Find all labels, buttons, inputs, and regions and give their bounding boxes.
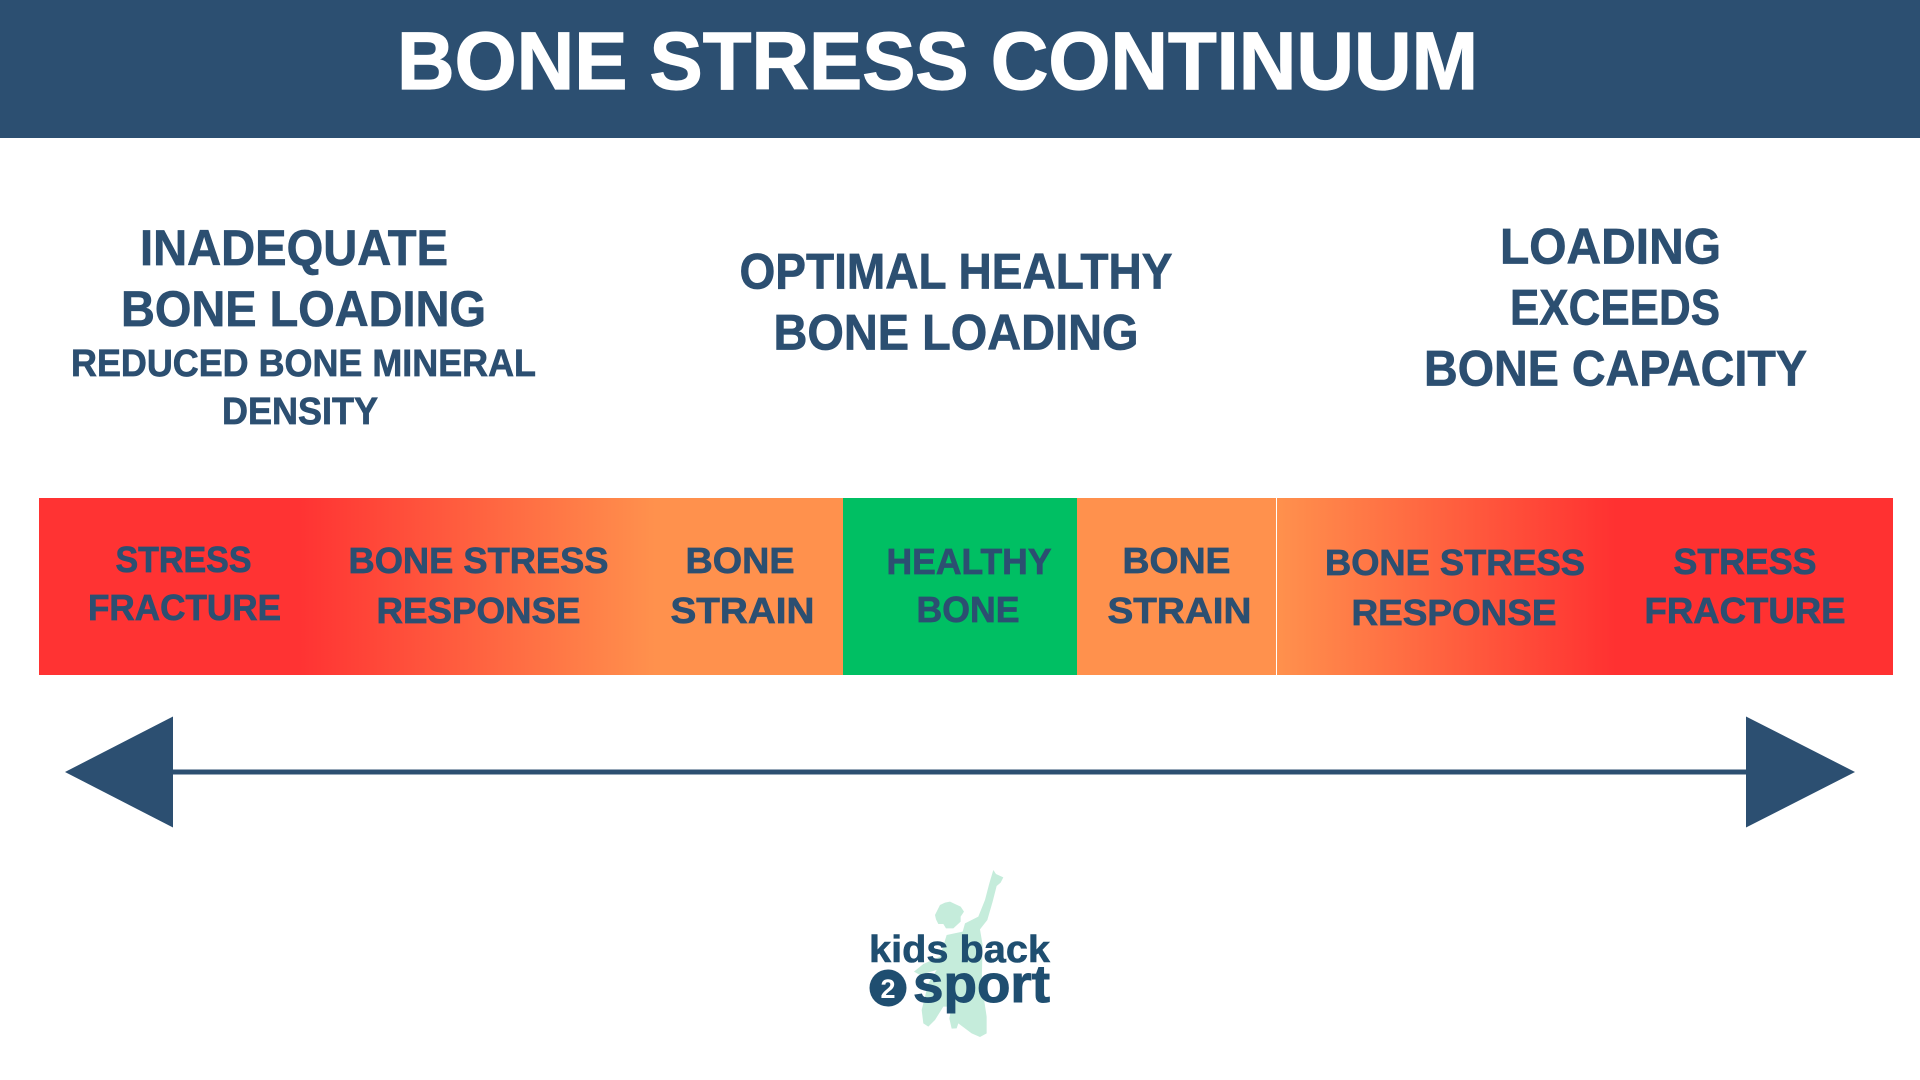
text block: inadequate bone loading <box>71 220 536 433</box>
segment: stress fracture left: FRACTURE <box>88 587 281 628</box>
text block: inadequate bone loading: DENSITY <box>222 391 378 433</box>
segment: bone stress response right: BONE STRESS <box>1325 542 1585 583</box>
segment: stress fracture left <box>39 498 301 675</box>
segment: bone strain right <box>1077 498 1276 675</box>
text block: inadequate bone loading: BONE LOADING <box>121 281 486 337</box>
segment: bone stress response left: RESPONSE <box>376 590 580 631</box>
text block: inadequate bone loading: INADEQUATE <box>140 220 448 276</box>
segment: stress fracture right: STRESS <box>1674 541 1816 582</box>
text block: optimal healthy bone loading: BONE LOADING <box>774 304 1138 360</box>
segment: bone strain left: BONE <box>686 540 794 581</box>
segment: healthy bone: HEALTHY <box>886 541 1052 582</box>
text block: inadequate bone loading: REDUCED BONE MINERAL <box>71 343 536 385</box>
segment: bone strain left <box>655 498 843 675</box>
segment: stress fracture right: FRACTURE <box>1644 590 1846 631</box>
segment: bone strain right: BONE <box>1122 540 1230 581</box>
text block: loading exceeds bone capacity: LOADING <box>1500 218 1721 274</box>
segment: bone stress response right: RESPONSE <box>1352 592 1556 633</box>
logo: kids back 2 sport: kids back <box>869 929 1051 971</box>
text block: optimal healthy bone loading: OPTIMAL HEALTHY <box>740 244 1172 300</box>
segment: healthy bone: BONE <box>916 589 1020 630</box>
segment: healthy bone <box>843 498 1077 675</box>
segment: bone stress response right <box>1277 498 1616 675</box>
header banner <box>0 0 1920 138</box>
segment: bone stress response left: BONE STRESS <box>348 540 608 581</box>
segment: stress fracture right <box>1615 498 1893 675</box>
continuum bar <box>39 498 1893 675</box>
double-headed arrow <box>65 716 1855 828</box>
segment: bone strain right: STRAIN <box>1108 590 1252 631</box>
text block: loading exceeds bone capacity: BONE CAPACITY <box>1424 340 1807 396</box>
icon: number 2 badge: 2 <box>880 974 896 1004</box>
text block: loading exceeds bone capacity <box>1424 218 1807 396</box>
icon: number 2 badge <box>870 970 906 1006</box>
segment: stress fracture left: STRESS <box>116 539 252 580</box>
text block: optimal healthy bone loading <box>740 244 1172 360</box>
segment: bone strain left: STRAIN <box>670 590 814 631</box>
text block: loading exceeds bone capacity: EXCEEDS <box>1510 280 1720 336</box>
logo: kids back 2 sport: sport <box>913 955 1050 1014</box>
title: BONE STRESS CONTINUUM <box>397 16 1478 107</box>
segment: bone stress response left <box>300 498 656 675</box>
icon: jumping child silhouette <box>914 870 1003 1037</box>
logo: kids back 2 sport <box>869 870 1051 1037</box>
